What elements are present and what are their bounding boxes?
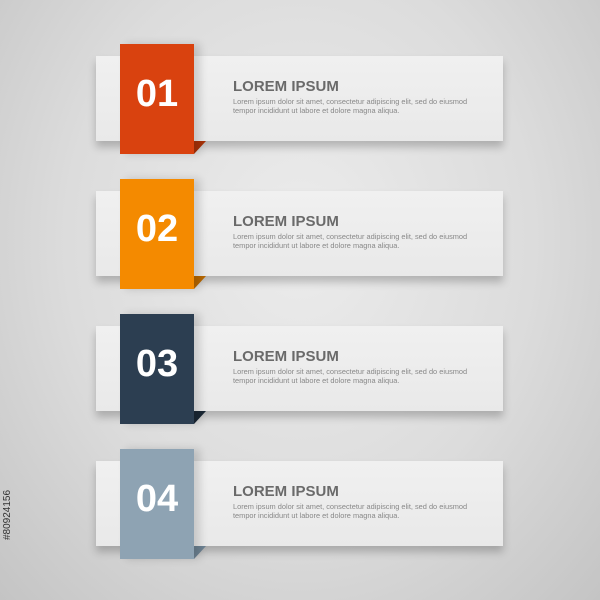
banner [96,461,503,546]
item 04 [92,446,507,562]
body text [233,97,467,115]
fold [194,546,206,559]
body text: tempor incididunt ut labore et dolore magna aliqua. [233,106,399,115]
body text: tempor incididunt ut labore et dolore magna aliqua. [233,376,399,385]
heading: LOREM IPSUM [233,348,339,365]
body text: Lorem ipsum dolor sit amet, consectetur adipiscing elit, sed do eiusmod [233,97,467,106]
heading: LOREM IPSUM [233,483,339,500]
tab 03 [120,314,194,424]
body text: tempor incididunt ut labore et dolore magna aliqua. [233,511,399,520]
banner [96,56,503,141]
stock id: #80924156 [2,490,13,540]
tab 02: 02 [136,208,178,250]
fold [194,276,206,289]
fold [194,411,206,424]
body text [233,502,467,520]
fold [194,141,206,154]
item 01 [92,42,507,156]
tab 03: 03 [136,343,178,385]
body text [233,232,467,250]
heading: LOREM IPSUM [233,78,339,95]
tab 04 [120,449,194,559]
body text: Lorem ipsum dolor sit amet, consectetur adipiscing elit, sed do eiusmod [233,502,467,511]
banner [96,191,503,276]
heading: LOREM IPSUM [233,213,339,230]
body text [233,367,467,385]
tab 01 [120,44,194,154]
body text: Lorem ipsum dolor sit amet, consectetur adipiscing elit, sed do eiusmod [233,232,467,241]
item 02 [92,176,507,292]
tab 04: 04 [136,478,178,520]
tab 01: 01 [136,73,178,115]
body text: Lorem ipsum dolor sit amet, consectetur adipiscing elit, sed do eiusmod [233,367,467,376]
item 03 [92,311,507,426]
banner [96,326,503,411]
tab 02 [120,179,194,289]
body text: tempor incididunt ut labore et dolore magna aliqua. [233,241,399,250]
